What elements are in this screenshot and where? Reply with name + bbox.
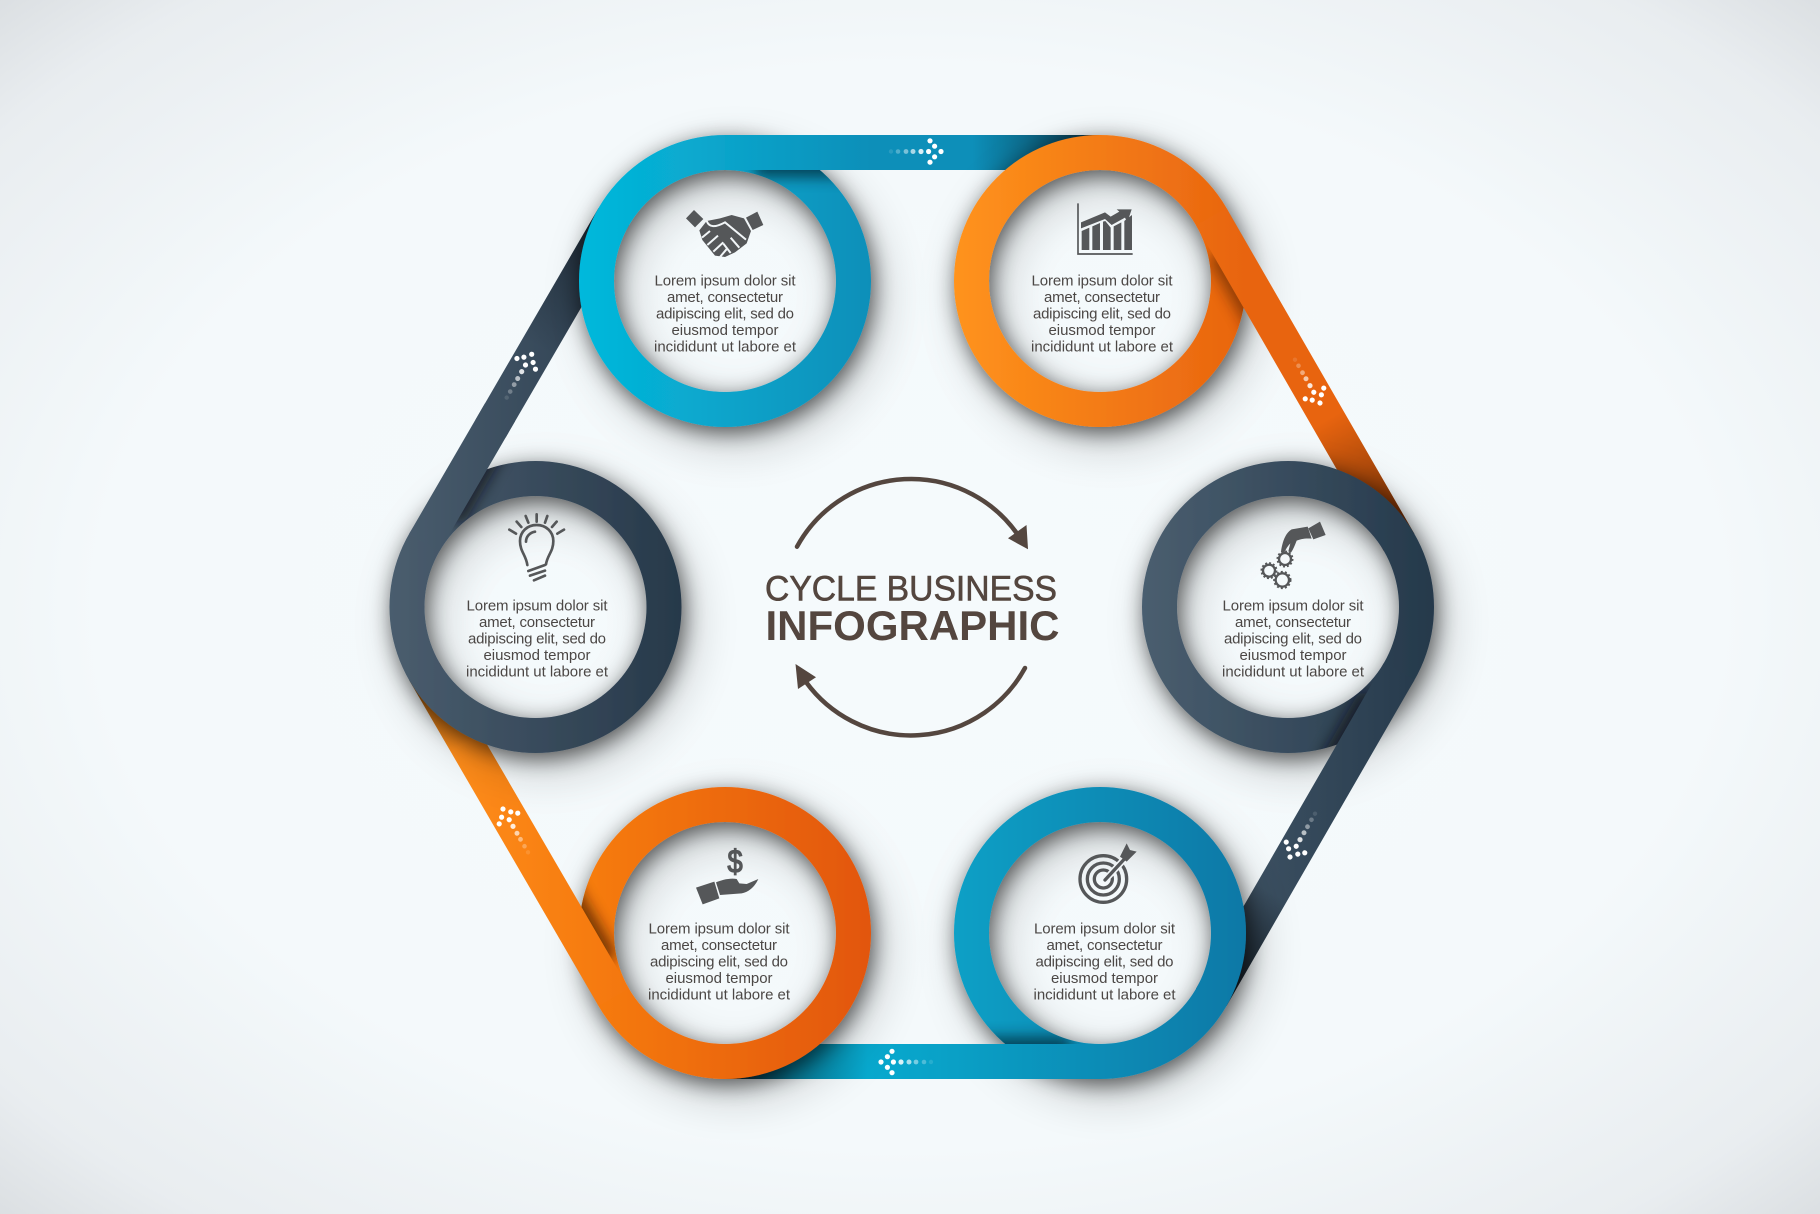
title <box>765 570 1060 649</box>
text: orange bottom-left ring: eiusmod tempor <box>666 970 772 987</box>
icon: hand with gears <box>1261 522 1326 588</box>
ring: bottom-right blue with ribbon <box>725 804 1228 1075</box>
icon: rising bar chart <box>1078 203 1133 254</box>
text: right slate ring: incididunt ut labore et <box>1222 664 1365 680</box>
text: orange bottom-left ring: incididunt ut labore et <box>648 986 791 1004</box>
text: left slate ring <box>466 598 609 680</box>
text: blue bottom-right ring <box>1034 920 1176 1004</box>
text: orange top-right ring: eiusmod tempor <box>1048 322 1156 339</box>
text: orange top-right ring: Lorem ipsum dolor sit <box>1032 272 1173 290</box>
title: INFOGRAPHIC <box>766 602 1060 649</box>
icon: handshake <box>686 210 763 257</box>
text: blue bottom-right ring: amet, consectetur <box>1046 937 1162 954</box>
text: blue bottom-right ring: adipiscing elit, sed do <box>1036 954 1174 970</box>
text: orange top-right ring: incididunt ut labore et <box>1031 338 1174 356</box>
arrow: top cycle arc <box>797 479 1028 549</box>
text: blue top-left ring: Lorem ipsum dolor sit <box>654 272 796 290</box>
text: blue bottom-right ring: Lorem ipsum dolor sit <box>1034 920 1176 938</box>
text: orange top-right ring: amet, consectetur <box>1044 289 1160 306</box>
text: left slate ring: Lorem ipsum dolor sit <box>466 598 608 614</box>
text: right slate ring: Lorem ipsum dolor sit <box>1222 598 1364 614</box>
text: blue bottom-right ring: eiusmod tempor <box>1051 970 1158 987</box>
ring: right dark slate with ribbon <box>1160 478 1416 997</box>
text: blue top-left ring <box>654 272 797 356</box>
text: right slate ring: eiusmod tempor <box>1240 647 1346 664</box>
icon: hand holding dollar: $ <box>727 844 743 880</box>
text: orange bottom-left ring: adipiscing elit, sed do <box>650 954 788 970</box>
text: blue top-left ring: amet, consectetur <box>667 289 783 306</box>
ring: left dark slate with ribbon <box>407 345 664 736</box>
text: orange bottom-left ring <box>648 920 791 1004</box>
arrow: bottom cycle arc <box>796 664 1025 735</box>
ring: top-left blue with ribbon <box>596 138 1100 409</box>
text: blue top-left ring: incididunt ut labore et <box>654 338 797 356</box>
icon: light bulb <box>509 514 564 580</box>
text: right slate ring <box>1222 598 1365 680</box>
text: blue top-left ring: adipiscing elit, sed do <box>656 306 794 322</box>
ring: top-right orange with ribbon <box>972 152 1399 543</box>
text: left slate ring: amet, consectetur <box>479 614 595 631</box>
text: right slate ring: amet, consectetur <box>1235 614 1351 631</box>
icon: hand holding dollar <box>696 844 758 904</box>
text: blue bottom-right ring: incididunt ut labore et <box>1034 986 1176 1004</box>
text: orange top-right ring: adipiscing elit, sed do <box>1033 306 1171 322</box>
text: left slate ring: eiusmod tempor <box>484 647 590 664</box>
icon: target with arrow <box>1080 843 1137 902</box>
text: orange bottom-left ring: amet, consectetur <box>661 937 777 954</box>
text: orange bottom-left ring: Lorem ipsum dolor sit <box>648 920 790 938</box>
text: left slate ring: adipiscing elit, sed do <box>468 630 606 648</box>
text: left slate ring: incididunt ut labore et <box>466 664 609 680</box>
title: CYCLE BUSINESS <box>765 570 1057 608</box>
ribbon: dark band end passing under the blue ring <box>491 217 614 429</box>
ring: bottom-left orange with ribbon <box>424 671 854 1062</box>
text: right slate ring: adipiscing elit, sed do <box>1224 630 1362 648</box>
text: blue top-left ring: eiusmod tempor <box>672 322 778 339</box>
text: orange top-right ring <box>1031 272 1174 356</box>
